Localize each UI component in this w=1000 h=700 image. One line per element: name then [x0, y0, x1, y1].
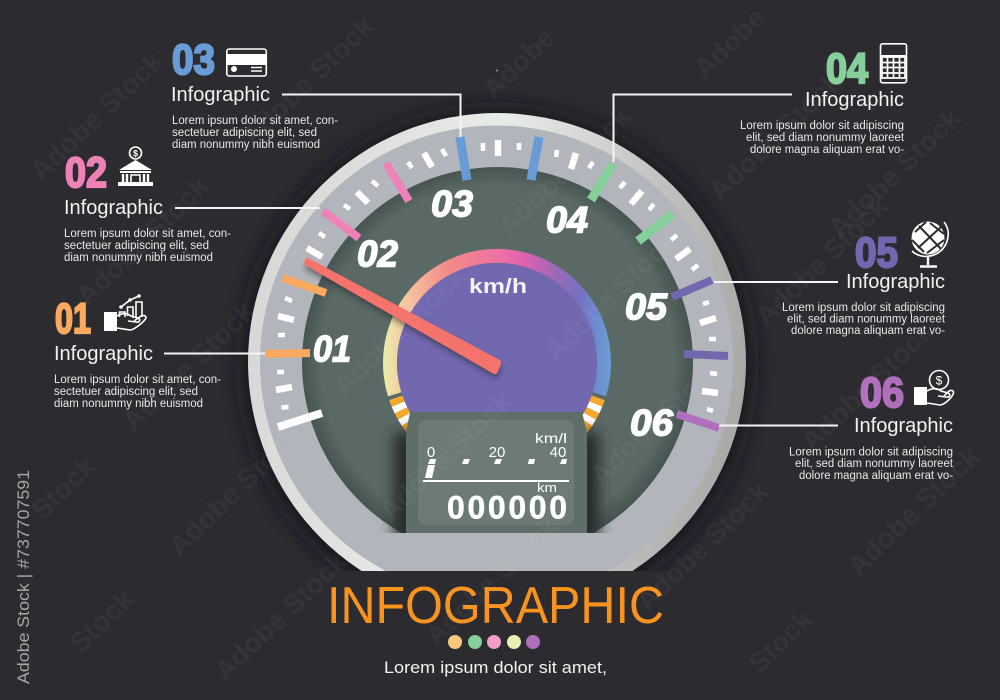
watermarks: Adobe Stock: [162, 420, 307, 562]
fuel scale ticks: [425, 459, 567, 478]
dark dial face: [302, 167, 693, 558]
heading 06: Infographic: [854, 415, 953, 437]
number 04: 04: [826, 45, 868, 93]
watermarks: Adobe Stock: [841, 440, 986, 582]
icon: calculator: [880, 44, 906, 83]
description 06: elit, sed diam nonummy laoreet: [795, 458, 954, 470]
icon: hand with coin: $: [936, 374, 943, 388]
dial number 05: 05: [625, 286, 668, 328]
watermarks: Adobe Stock: [538, 225, 683, 367]
heading 04: Infographic: [805, 89, 904, 111]
watermarks: Adobe Stock: [208, 545, 353, 687]
subtitle: Lorem ipsum dolor sit amet,: [384, 659, 607, 677]
grey tick band: [260, 126, 733, 598]
section 04: [614, 44, 906, 162]
description 04: [740, 120, 905, 156]
watermarks: Adobe: [476, 22, 560, 105]
major ticks: 05 purple: [672, 280, 728, 356]
description 02: sectetuer adipiscing elit, sed: [64, 240, 209, 252]
km/l label: km/l: [535, 431, 567, 446]
description 01: diam nonummy nibh euismod: [54, 398, 203, 410]
connector 01: [164, 352, 265, 354]
fuel scale numbers: [427, 444, 566, 461]
number 05: 05: [855, 229, 898, 277]
dial number 04: 04: [546, 200, 588, 240]
watermarks: Adobe Stock: [373, 385, 518, 527]
major ticks: 03 blue: [460, 137, 539, 180]
needle shadow: [305, 263, 502, 379]
major ticks: 01 orange: [265, 278, 326, 354]
number 06: 06: [860, 369, 904, 417]
watermarks: Adobe Stock: [281, 135, 426, 277]
small speck: [496, 70, 498, 72]
description 02: diam nonummy nibh euismod: [64, 252, 213, 264]
heading 03: Infographic: [171, 84, 270, 106]
left orange and white ring stripes: [346, 212, 648, 514]
colour dots: [448, 635, 540, 649]
needle: [303, 257, 501, 374]
description 02: Lorem ipsum dolor sit amet, con-: [64, 228, 231, 240]
watermarks: Adobe Stock: [703, 65, 848, 207]
minor tick marks: [276, 140, 718, 411]
right orange and white ring stripes: [347, 213, 647, 513]
major ticks: 02 pink: [323, 163, 409, 238]
fuel scale numbers: 20: [489, 444, 505, 461]
watermarks: Adobe Stock: [24, 45, 169, 187]
watermarks: Stock: [25, 450, 102, 526]
major ticks: 04 green: [591, 164, 673, 241]
display panel shadow: [394, 432, 599, 542]
watermarks: Adobe Stock: [584, 350, 729, 492]
description 03: sectetuer adipiscing elit, sed: [172, 127, 317, 139]
dial number 01: 01: [313, 328, 351, 370]
description 06: [789, 446, 954, 482]
watermarks: Stock: [63, 583, 140, 659]
fuel scale numbers: 0: [427, 444, 435, 461]
icon: bank: $: [133, 148, 138, 158]
outer bezel: [248, 113, 746, 611]
description 05: dolore magna aliquam erat vo-: [791, 325, 945, 337]
section 01: [54, 294, 265, 410]
watermarks: Adobe Stock: [492, 100, 637, 242]
description 05: Lorem ipsum dolor sit adipiscing: [782, 302, 945, 314]
description 04: dolore magna aliquam erat vo-: [750, 144, 904, 156]
speedometer gauge: [243, 110, 751, 618]
dial number 03: 03: [431, 184, 473, 224]
watermarks: Adobe Stock: [70, 170, 215, 312]
connector 06: [719, 424, 838, 426]
km label: km: [537, 481, 557, 495]
fuel scale numbers: 40: [550, 444, 566, 461]
odometer digits: 000000: [447, 490, 567, 526]
major tick: start: [278, 413, 322, 427]
icon: hand with growth chart: [104, 294, 146, 331]
connector 03: [282, 94, 460, 137]
number 03: 03: [172, 36, 215, 84]
description 05: [782, 302, 946, 337]
icon: bank: [118, 147, 153, 186]
section 02: [64, 147, 320, 264]
watermarks: Adobe Stock: [749, 190, 894, 332]
description 06: dolore magna aliquam erat vo-: [799, 470, 953, 482]
section 06: [719, 369, 954, 482]
watermarks: Adobe Stock: [235, 10, 380, 152]
icon: globe: [912, 222, 948, 266]
main title: INFOGRAPHIC: [327, 577, 664, 635]
description 01: Lorem ipsum dolor sit amet, con-: [54, 374, 221, 386]
watermarks: Adobe: [687, 2, 771, 85]
description 03: diam nonummy nibh euismod: [172, 139, 320, 151]
connector 04: [614, 94, 792, 162]
section 03: [171, 36, 460, 151]
stock id side text: Adobe Stock | #737707591: [14, 470, 33, 684]
watermarks: Adobe Stock: [822, 102, 967, 244]
description 01: sectetuer adipiscing elit, sed: [54, 386, 198, 398]
heading 02: Infographic: [64, 197, 163, 219]
watermarks: Stock: [742, 603, 819, 679]
dial number 02: 02: [357, 234, 398, 274]
number 02: 02: [65, 149, 107, 197]
major tick: 06 magenta: [677, 414, 719, 428]
description 03: Lorem ipsum dolor sit amet, con-: [172, 115, 338, 127]
heading 01: Infographic: [54, 343, 153, 365]
purple centre: [397, 263, 597, 412]
gradient speed ring: [390, 256, 604, 394]
gauge drop shadow: [243, 110, 751, 618]
description 04: elit, sed diam nonummy laoreet: [746, 132, 905, 144]
dial number 06: 06: [630, 402, 673, 444]
section 05: [714, 222, 948, 337]
display panel: [406, 412, 587, 533]
description 05: elit, sed diam nonummy laoreet: [787, 314, 946, 326]
number 01: 01: [55, 295, 91, 343]
watermarks: Adobe Stock: [419, 510, 564, 652]
LCD divider: [423, 480, 569, 482]
LCD background: [418, 420, 574, 525]
km/h label: km/h: [469, 276, 527, 298]
connector 02: [175, 207, 320, 209]
watermarks: Adobe Stock: [795, 315, 940, 457]
connector 05: [714, 281, 838, 283]
watermarks: Adobe Stock: [630, 475, 775, 617]
icon: hand with coin: [914, 370, 954, 405]
LCD screen: [418, 420, 574, 526]
description 04: Lorem ipsum dolor sit adipiscing: [740, 120, 904, 132]
description 03: [172, 115, 338, 151]
description 06: Lorem ipsum dolor sit adipiscing: [789, 446, 953, 458]
description 01: [54, 374, 221, 410]
icon: credit card: [227, 49, 266, 76]
watermarks: Adobe Stock: [116, 295, 261, 437]
heading 05: Infographic: [846, 271, 945, 293]
description 02: [64, 228, 231, 264]
watermarks: Adobe Stock: [327, 260, 472, 402]
